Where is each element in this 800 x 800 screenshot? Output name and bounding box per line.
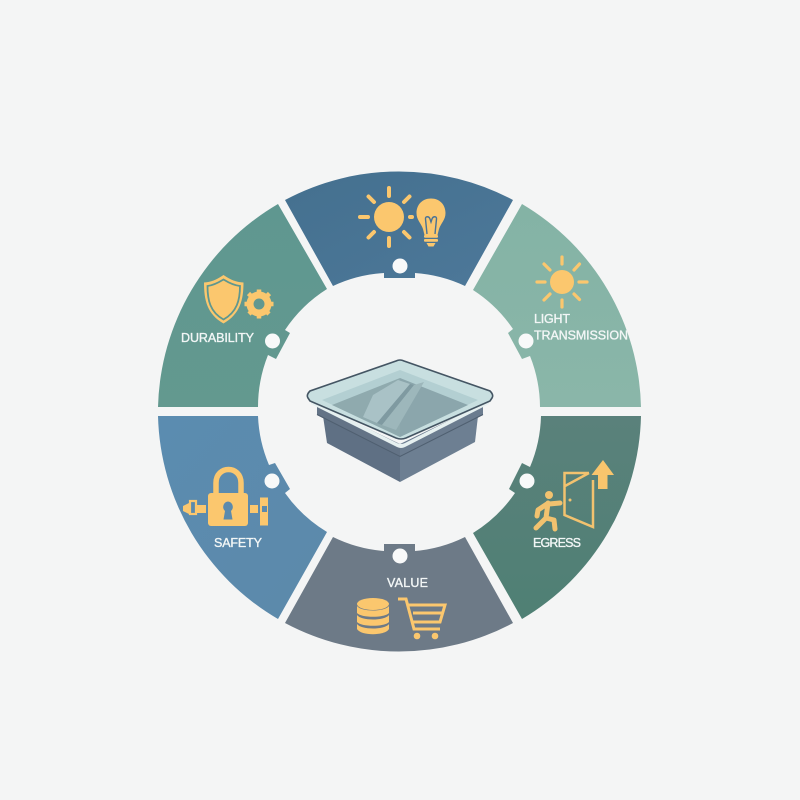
skylight glass dome bbox=[307, 360, 493, 448]
label: egress: EGRESS bbox=[533, 536, 581, 550]
panel: durability segment bbox=[158, 204, 327, 407]
label: safety: SAFETY bbox=[214, 536, 263, 550]
center illustration: skylight bbox=[307, 360, 493, 482]
icon: seat belt bbox=[183, 498, 268, 526]
icon: gear bbox=[244, 290, 274, 318]
panel: light transmission segment bbox=[473, 204, 641, 407]
label: value: VALUE bbox=[387, 576, 428, 590]
icon: shopping cart bbox=[398, 599, 445, 639]
skylight body bbox=[323, 416, 478, 482]
label: light transmission bbox=[534, 312, 628, 342]
icon: shield bbox=[204, 275, 244, 324]
label: light transmission: TRANSMISSION bbox=[534, 328, 628, 342]
icon: running person bbox=[536, 491, 560, 529]
icon: coin stack bbox=[357, 598, 389, 634]
icon: padlock bbox=[208, 470, 248, 526]
label: durability: DURABILITY bbox=[181, 331, 255, 345]
icon: door bbox=[564, 473, 593, 527]
panel: safety segment bbox=[158, 416, 327, 619]
icon: sun bbox=[360, 188, 412, 246]
skylight collar bbox=[317, 404, 483, 457]
connector dot bbox=[392, 548, 408, 564]
panel: top light and energy segment bbox=[285, 171, 513, 286]
label: light transmission: LIGHT bbox=[534, 312, 570, 326]
icon: up arrow bbox=[592, 460, 614, 489]
icon: sun bbox=[537, 257, 587, 307]
panel: value segment bbox=[285, 537, 513, 652]
connector dot bbox=[520, 474, 534, 488]
connector dot bbox=[264, 474, 280, 488]
connector dot bbox=[265, 334, 280, 348]
icon: light bulb bbox=[416, 198, 446, 246]
connector dot bbox=[392, 258, 408, 274]
panel: egress segment bbox=[473, 416, 641, 619]
connector dot bbox=[518, 334, 534, 348]
